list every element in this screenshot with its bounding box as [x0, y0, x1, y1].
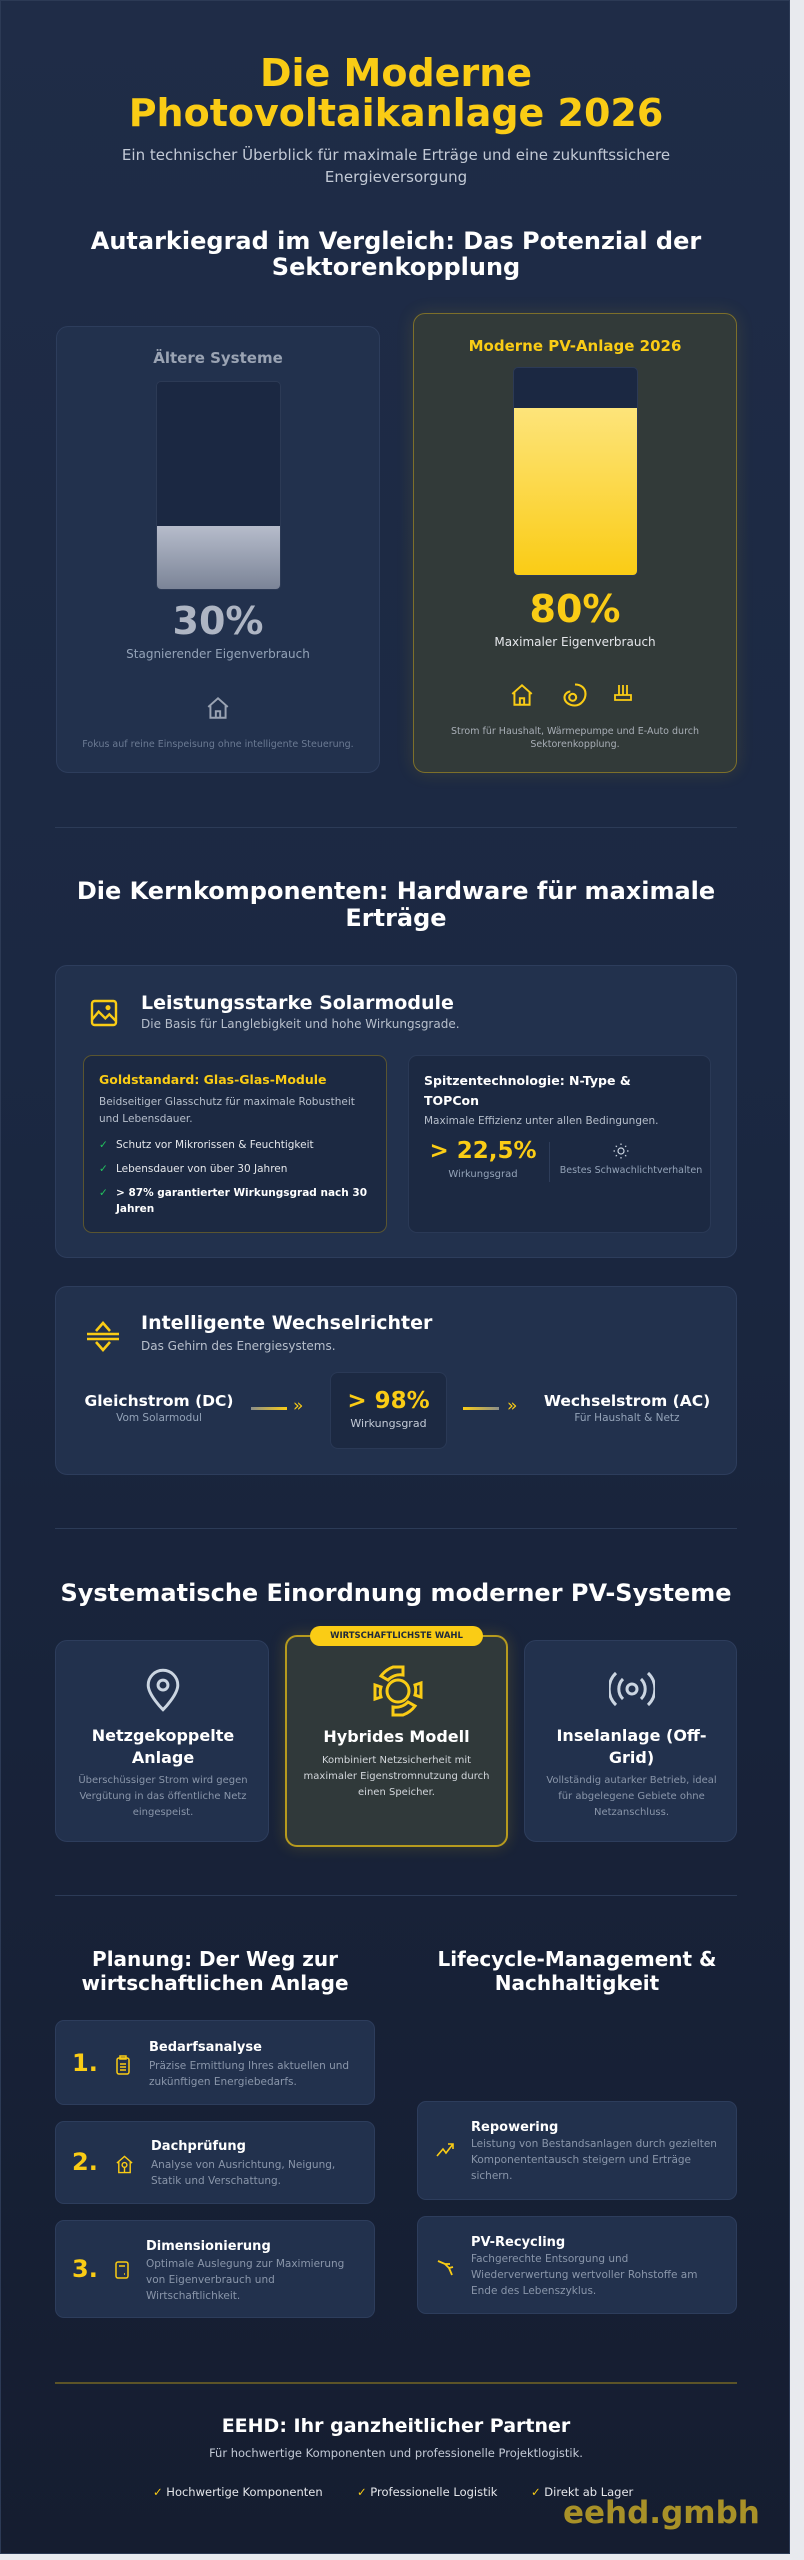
footer checklist: ✓ Hochwertige Komponenten — [153, 2485, 323, 2499]
icon: module — [90, 1000, 118, 1026]
panel: hybrid: Kombiniert Netzsicherheit mit maximaler Eigenstromnutzung durch einen Speicher. — [304, 1755, 489, 1798]
heading: Autarkiegrad: Autarkiegrad im Vergleich: Das Potenzial der Sektorenkopplung — [91, 227, 701, 281]
lifecycle: repowering: Repowering — [471, 2120, 558, 2135]
heading: Planung: Planung: Der Weg zur wirtschaftlichen Anlage — [81, 1947, 349, 1995]
panel: hybrid: Hybrides Modell — [323, 1727, 470, 1746]
heading: Lifecycle: Lifecycle-Management & Nachhaltigkeit — [438, 1947, 716, 1995]
step 3: Optimale Auslegung zur Maximierung von Eigenverbrauch und Wirtschaftlichkeit. — [146, 2258, 344, 2302]
badge: WIRTSCHAFTLICHSTE WAHL — [330, 1631, 463, 1641]
checklist: ✓ — [99, 1139, 108, 1151]
panel: grid-tied: Netzgekoppelte Anlage — [92, 1726, 234, 1767]
icon: hybrid — [374, 1666, 422, 1716]
checklist: Schutz vor Mikrorissen & Feuchtigkeit — [116, 1139, 314, 1151]
icon: calculator — [115, 2261, 129, 2279]
step 2: Analyse von Ausrichtung, Neigung, Statik und Verschattung. — [151, 2159, 335, 2187]
subpanel: N-Type: Spitzentechnologie: N-Type & TOPCon — [424, 1073, 631, 1108]
description: Strom für Haushalt, Wärmepumpe und E-Auto durch Sektorenkopplung. — [451, 726, 699, 750]
checklist: > 87% garantierter Wirkungsgrad nach 30 Jahren — [116, 1187, 367, 1215]
footer checklist: ✓ Direkt ab Lager — [531, 2485, 633, 2499]
caption: Stagnierender Eigenverbrauch — [126, 647, 310, 661]
step 2: 2. — [72, 2148, 98, 2176]
flow: AC: Wechselstrom (AC) — [544, 1392, 710, 1410]
icon: inverter — [87, 1321, 119, 1352]
icon: clipboard — [116, 2055, 130, 2075]
panel: hybrid — [285, 1635, 508, 1847]
flow: AC: Für Haushalt & Netz — [574, 1412, 680, 1424]
heading: Systematische Einordnung: Systematische Einordnung moderner PV-Systeme — [60, 1579, 732, 1607]
subpanel: N-Type — [408, 1055, 711, 1233]
subpanel: N-Type: Wirkungsgrad — [448, 1169, 518, 1180]
lifecycle: recycling: Fachgerechte Entsorgung und Wiederverwertung wertvoller Rohstoffe am Ende des Lebenszyklus. — [471, 2253, 697, 2297]
arrow left: » — [293, 1396, 303, 1416]
subheading: Die Basis für Langlebigkeit und hohe Wirkungsgrade. — [141, 1017, 460, 1031]
step 3 — [55, 2220, 375, 2318]
panel: off-grid — [524, 1640, 737, 1842]
checklist: ✓ — [99, 1187, 108, 1199]
flow: DC: Gleichstrom (DC) — [85, 1392, 233, 1410]
subpanel: glass-glass: Goldstandard: Glas-Glas-Module — [99, 1072, 327, 1087]
bar 80% — [513, 367, 638, 576]
step 1: 1. — [72, 2049, 98, 2077]
badge — [310, 1626, 483, 1646]
flow: DC — [85, 1392, 233, 1424]
value 30%: 30% — [173, 599, 263, 643]
footer subtitle: Für hochwertige Komponenten und professionelle Projektlogistik. — [209, 2446, 583, 2460]
panel: grid-tied: Überschüssiger Strom wird gegen Vergütung in das öffentliche Netz eingespeist. — [78, 1775, 248, 1818]
heading: Intelligente Wechselrichter — [141, 1312, 432, 1334]
flow: DC: Vom Solarmodul — [116, 1412, 202, 1424]
panel: older systems — [56, 326, 380, 773]
panel: off-grid: Inselanlage (Off-Grid) — [556, 1726, 707, 1767]
heading: Kernkomponenten: Die Kernkomponenten: Hardware für maximale Erträge — [77, 877, 715, 932]
value 80%: 80% — [530, 587, 620, 631]
footer checklist — [153, 2485, 634, 2499]
icon: house — [208, 697, 228, 719]
footer title: EEHD: Ihr ganzheitlicher Partner — [222, 2415, 570, 2437]
bar 30% — [156, 381, 281, 590]
icons: house, heat pump, car — [512, 684, 632, 706]
panel: solar modules — [55, 965, 737, 1258]
icon: house — [116, 2156, 132, 2174]
icon: sun — [614, 1144, 628, 1158]
stat 98% — [330, 1372, 447, 1449]
flow: AC — [544, 1392, 710, 1424]
step 1 — [55, 2020, 375, 2105]
footnote: Fokus auf reine Einspeisung ohne intelligente Steuerung. — [82, 739, 354, 750]
panel: inverters — [55, 1286, 737, 1475]
step 3: Dimensionierung — [146, 2239, 271, 2254]
checklist — [99, 1139, 367, 1215]
step 1: Präzise Ermittlung Ihres aktuellen und zukünftigen Energiebedarfs. — [149, 2060, 349, 2088]
icon: pin — [146, 1668, 180, 1712]
subpanel: N-Type: Maximale Effizienz unter allen Bedingungen. — [424, 1115, 658, 1127]
title: Photovoltaikanlage 2026 — [129, 91, 663, 135]
step 3: 3. — [72, 2255, 98, 2283]
stat 22,5%: > 22,5% — [429, 1138, 537, 1164]
stat 98%: > 98% — [347, 1388, 430, 1414]
subpanel: N-Type: Bestes Schwachlichtverhalten — [560, 1165, 702, 1176]
label older: Ältere Systeme — [153, 349, 283, 367]
lifecycle: recycling — [417, 2216, 737, 2314]
subheading: Das Gehirn des Energiesystems. — [141, 1339, 336, 1353]
icon: trend — [436, 2143, 454, 2156]
title: Die Moderne — [260, 51, 532, 95]
step 2 — [55, 2121, 375, 2204]
footer checklist: ✓ Professionelle Logistik — [357, 2485, 497, 2499]
panel: grid-tied — [55, 1640, 269, 1842]
lifecycle: recycling: PV-Recycling — [471, 2235, 565, 2250]
panel: modern system — [413, 313, 737, 773]
checklist: Lebensdauer von über 30 Jahren — [116, 1163, 287, 1175]
title — [129, 51, 663, 135]
icon: broadcast — [609, 1672, 655, 1706]
checklist: ✓ — [99, 1163, 108, 1175]
arrow right: » — [507, 1396, 517, 1416]
step 1: Bedarfsanalyse — [149, 2040, 262, 2055]
icon: recycle — [438, 2260, 454, 2276]
label modern: Moderne PV-Anlage 2026 — [469, 337, 681, 355]
lifecycle: repowering — [417, 2101, 737, 2200]
arrow left — [251, 1396, 303, 1416]
stat 98%: Wirkungsgrad — [350, 1417, 427, 1430]
watermark: eehd.gmbh — [563, 2495, 760, 2531]
subtitle: Ein technischer Überblick für maximale Erträge und eine zukunftssichere Energieversorgung — [122, 146, 670, 186]
subpanel: glass-glass: Beidseitiger Glasschutz für maximale Robustheit und Lebensdauer. — [99, 1096, 355, 1125]
step 2: Dachprüfung — [151, 2139, 246, 2154]
arrow right — [463, 1396, 517, 1416]
caption: Maximaler Eigenverbrauch — [494, 635, 656, 649]
divider gold — [55, 2382, 737, 2384]
subpanel: glass-glass — [83, 1055, 387, 1233]
heading: Leistungsstarke Solarmodule — [141, 992, 454, 1014]
lifecycle: repowering: Leistung von Bestandsanlagen durch gezielten Komponententausch steigern und Erträge sichern. — [471, 2138, 717, 2182]
panel: off-grid: Vollständig autarker Betrieb, ideal für abgelegene Gebiete ohne Netzanschluss. — [546, 1775, 717, 1818]
